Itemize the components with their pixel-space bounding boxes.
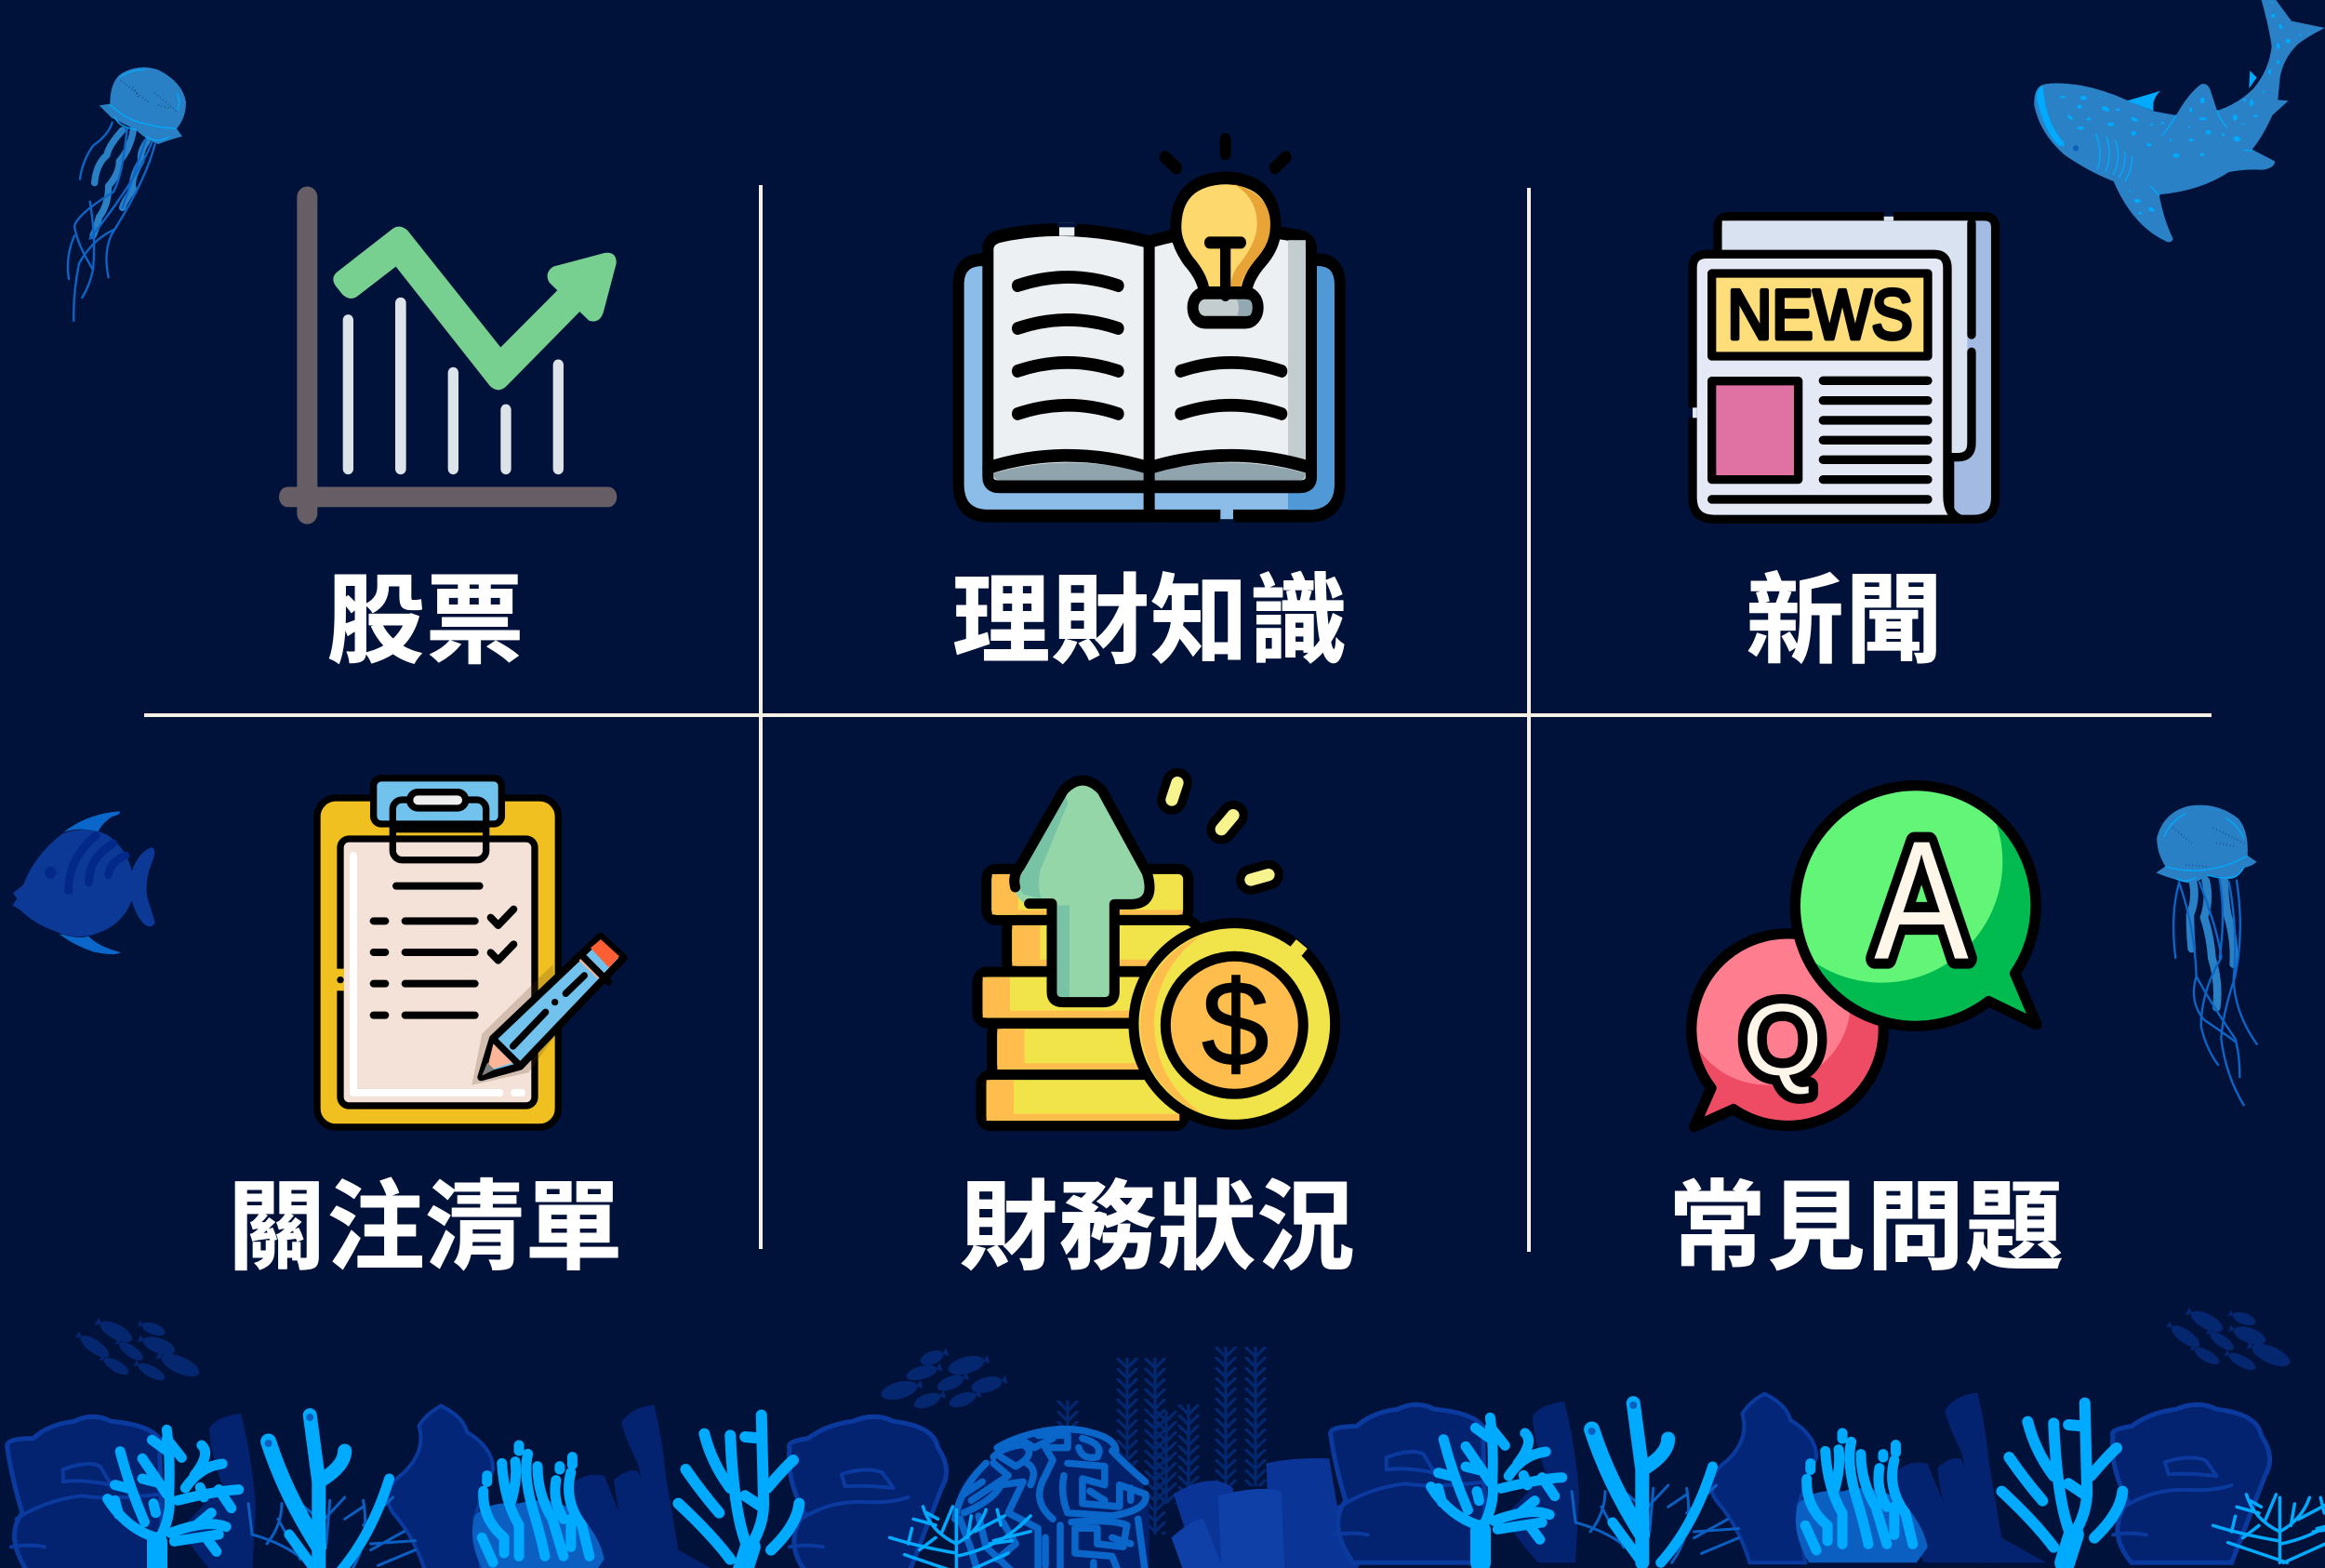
coral: fine branches <box>890 1507 1030 1568</box>
fish school left <box>73 1315 203 1384</box>
jellyfish right <box>2156 805 2257 1105</box>
seaweed behind coral <box>1056 1347 1268 1535</box>
icon: coins and up arrow <box>977 780 1335 1126</box>
label: financial knowledge: 理財知識 <box>952 567 1348 676</box>
coral: tube branch <box>265 1414 390 1568</box>
tube coral <box>1172 1458 1362 1568</box>
coral: branching tree <box>108 1429 239 1568</box>
icon: Q and A speech bubbles <box>1683 741 2037 1127</box>
jellyfish top left <box>68 67 186 321</box>
label: financial status: 財務狀況 <box>960 1174 1356 1282</box>
coral: finger <box>482 1445 590 1562</box>
label: FAQ: 常見問題 <box>1668 1174 2065 1282</box>
fish school right <box>2164 1305 2293 1374</box>
coral: bottle sponge <box>388 1406 493 1568</box>
icon: book and light bulb <box>959 140 1340 521</box>
fish left <box>12 811 155 954</box>
Q bubble <box>1683 918 1883 1127</box>
icon: coins and up arrow: $ <box>1202 955 1269 1091</box>
icon: newspaper: NEWS <box>1727 275 1913 353</box>
whale shark <box>2034 0 2325 242</box>
coral: rounded sponge 2 <box>789 1416 947 1568</box>
icon: stock chart <box>279 186 617 525</box>
A bubble: A <box>1874 805 1969 995</box>
coral: thin blue branches <box>248 1497 415 1568</box>
coral: tall branch <box>678 1415 799 1568</box>
icon: clipboard with pencil <box>317 778 624 1127</box>
icon: newspaper <box>1691 214 1996 519</box>
coral: slanted tubes <box>181 1405 723 1568</box>
brain coral <box>952 1428 1149 1568</box>
A bubble <box>1789 780 2042 1031</box>
label: watchlist: 關注清單 <box>228 1174 624 1282</box>
coral reef left half <box>7 1405 1030 1568</box>
coral: finger base <box>472 1500 604 1568</box>
coral: rounded sponge <box>7 1416 163 1568</box>
Q bubble: Q <box>1743 983 1822 1097</box>
coral reef right half <box>1331 1393 2325 1562</box>
label: stocks: 股票 <box>326 567 525 676</box>
coin stack <box>977 869 1197 1126</box>
fish school middle <box>879 1346 1008 1412</box>
label: news: 新聞 <box>1746 567 1945 676</box>
